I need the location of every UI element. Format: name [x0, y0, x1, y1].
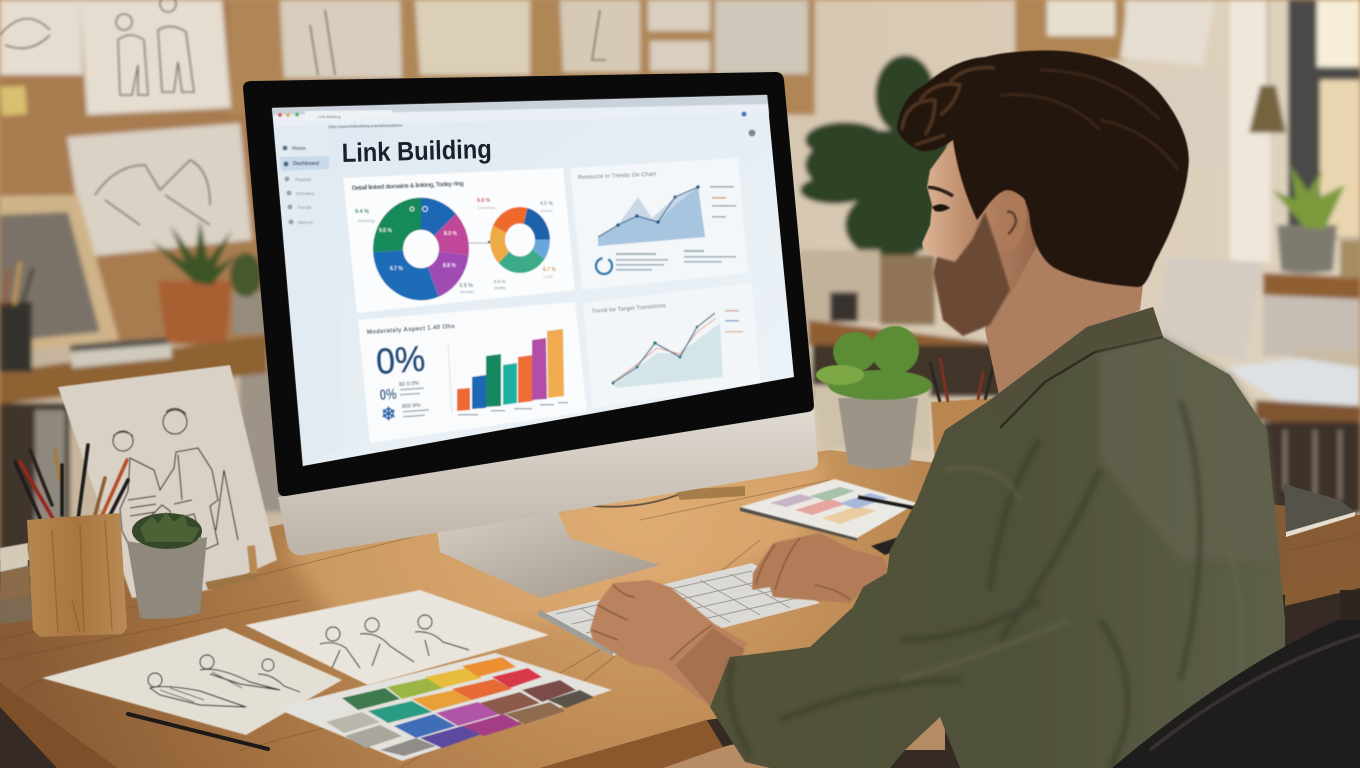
computer monitor [243, 72, 818, 598]
large donut chart [388, 214, 454, 284]
sidebar [274, 125, 345, 466]
panel: donut charts: 9.5 % [379, 228, 392, 234]
panel: donut charts: Referring [358, 218, 374, 223]
hanging lamp [1250, 0, 1285, 132]
head and face [922, 140, 1040, 335]
panel: donut charts: 8.3 % [444, 231, 457, 237]
right shelf [1263, 296, 1360, 356]
ear [1002, 194, 1026, 253]
sidebar: Domains [296, 191, 315, 196]
back table [808, 320, 1010, 362]
succulent pot [127, 512, 207, 619]
panel: donut charts: 9.4 % [355, 209, 369, 215]
panel: donut charts: Traffic [543, 275, 553, 279]
area chart [598, 185, 705, 246]
line chart [613, 323, 723, 388]
browser chrome: Link Building [318, 114, 341, 119]
panel: donut charts: Quality [494, 286, 506, 290]
window plant [1272, 165, 1345, 229]
screen title: Link Building [341, 134, 492, 168]
panel: bar chart: Moderately Aspect 1.40 Ohs [367, 323, 455, 336]
shirt [710, 307, 1285, 768]
panel: donut charts: 4.5 % [540, 201, 553, 207]
monitor stand [437, 512, 660, 598]
notebook with colour chart [740, 479, 920, 555]
panel: donut charts: 9.8 % [477, 198, 491, 204]
desk paper sketch right [245, 590, 549, 685]
sidebar: Metrics [298, 220, 314, 225]
panel: area chart: Resource in Trends On Chart [578, 172, 656, 181]
panel: donut charts: 8.8 % [443, 263, 456, 269]
desk sketch sheet with figures [58, 365, 277, 598]
right hand on keyboard [752, 533, 890, 603]
panel: donut charts: Anchor [541, 209, 554, 213]
panel: line chart: Trend for Target Transitions [592, 303, 666, 315]
shelf plant [150, 220, 262, 297]
terracotta pot [158, 281, 232, 344]
panel: bar chart: 0% [379, 386, 397, 404]
panel: area chart [570, 158, 748, 290]
sidebar: Dashboard [293, 161, 319, 167]
background paper stack [812, 385, 930, 450]
pencil cup on shelf [0, 302, 32, 372]
hair [897, 50, 1189, 287]
left hand on keyboard [590, 580, 747, 708]
sidebar: Trends [297, 205, 312, 210]
monitor screen [272, 95, 794, 466]
monitor bezel [243, 72, 814, 496]
panel: donut charts: 6.7 % [390, 266, 403, 272]
desk [0, 450, 1360, 768]
panel: donut charts: Domain [460, 289, 474, 294]
right back table [1293, 349, 1360, 371]
small donut chart [498, 215, 542, 265]
neck [985, 240, 1143, 400]
window plant pot [1277, 225, 1337, 274]
panel: bar chart [358, 302, 587, 443]
beard [933, 212, 1010, 336]
eye and brow [928, 187, 953, 212]
under-desk shadow and floor [0, 560, 1360, 768]
panel: bar chart: 850 9% [402, 403, 421, 410]
panel: line chart [583, 283, 760, 408]
colour swatch card [275, 653, 612, 761]
sidebar: Reports [295, 177, 312, 182]
sidebar: Home [292, 146, 306, 152]
panel: donut charts: Detail linked domains & linking, Today ring [352, 180, 464, 192]
pen on desk [128, 714, 268, 749]
desk paper sketch left [42, 628, 342, 735]
panel: donut charts: 3.9 % [459, 283, 473, 289]
office chair [1112, 610, 1360, 768]
curls and hair highlights [902, 68, 1178, 170]
browser chrome: https://www.linkbuilding.example/analytics [328, 122, 402, 129]
window [1288, 0, 1360, 238]
books on shelf [70, 337, 172, 368]
keyboard [537, 563, 820, 656]
picture frame [0, 195, 119, 355]
small pot [233, 292, 265, 334]
panel: bar chart: 0% [375, 338, 426, 382]
cable [585, 486, 745, 507]
wooden pencil holder [15, 445, 128, 637]
panel: donut charts: 6.7 % [543, 267, 556, 273]
sketch lines on wall papers [0, 0, 606, 225]
left shelf [0, 335, 268, 404]
wall papers [0, 0, 1263, 360]
panel: donut charts [343, 168, 575, 313]
right desk folder [1284, 484, 1360, 620]
man at desk [590, 50, 1285, 768]
monitor chin [278, 410, 818, 555]
panel: donut charts: Link share [478, 206, 496, 210]
center plant [800, 55, 955, 260]
panel: donut charts: 6.9 % [494, 279, 506, 284]
bars [457, 329, 564, 411]
snowflake network icon: ❄ [381, 404, 396, 424]
panel: bar chart: 80 0.0% [399, 381, 419, 388]
mini ring gauge [596, 258, 612, 274]
shirt collar and folds [729, 307, 1280, 768]
book stack [0, 543, 32, 624]
right desk plant and pen cup [816, 326, 995, 469]
sticky note [0, 86, 27, 116]
browser chrome [272, 95, 769, 136]
